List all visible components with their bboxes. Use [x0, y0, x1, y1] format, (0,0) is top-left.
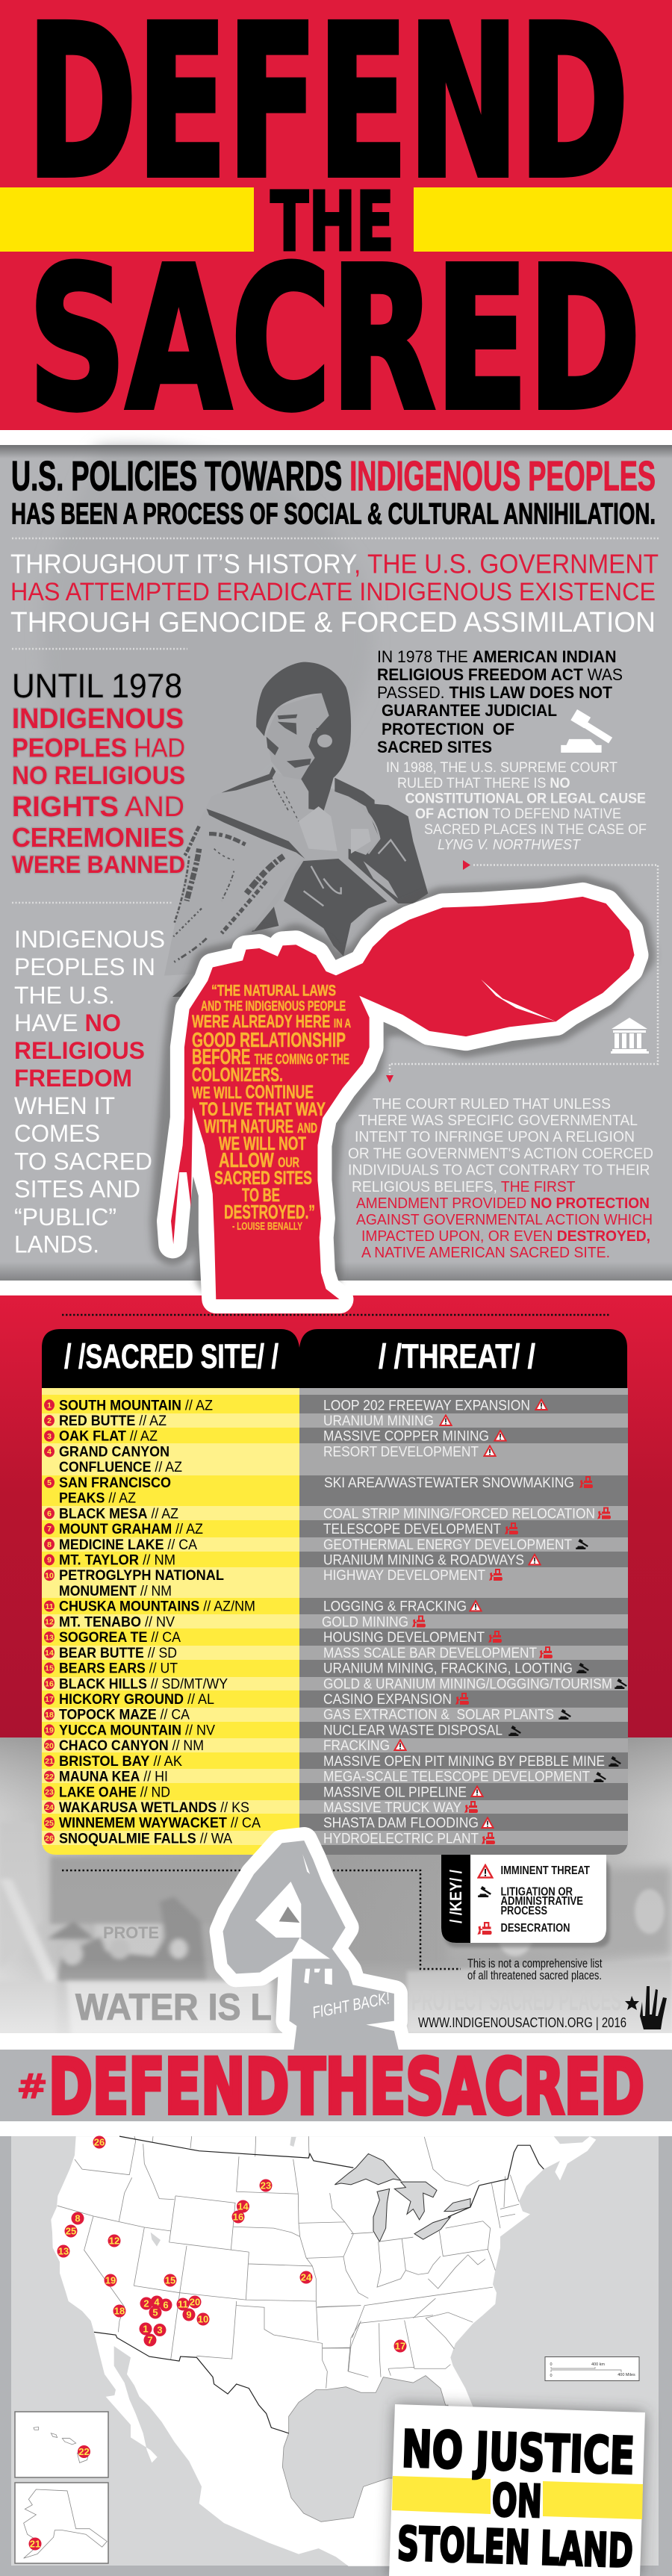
table: sacred sites and threats	[42, 1329, 628, 1855]
row 23 Lake Oahe: 23	[45, 1788, 54, 1796]
statement: history of eradication: THROUGH GENOCIDE & FORCED ASSIMILATION	[10, 607, 656, 638]
row 26 Snoqualmie Falls: HYDROELECTRIC PLANT	[323, 1831, 479, 1847]
row 19 Yucca Mountain: YUCCA MOUNTAIN // NV	[59, 1722, 215, 1738]
quote by Louise Benally: TO BE	[242, 1185, 280, 1206]
icon: gavel	[561, 709, 612, 753]
row 12 Mt. Tenabo: MT. TENABO // NV	[59, 1614, 175, 1630]
row 10 Petroglyph National Monument: 10	[45, 1571, 54, 1580]
excavator body	[223, 1841, 399, 2061]
text block: no religious freedom: PEOPLES IN	[14, 953, 155, 980]
header banner background	[0, 0, 672, 430]
text block: 1988 Supreme Court: SACRED PLACES IN THE CASE OF	[424, 822, 647, 838]
key label: imminent threat: IMMINENT THREAT	[500, 1864, 590, 1877]
text block: court ruling: RELIGIOUS BELIEFS, THE FIRST	[352, 1179, 575, 1195]
key icon: imminent threat	[479, 1865, 492, 1878]
portrait of Indigenous woman	[164, 662, 428, 997]
inset map: Hawaii	[15, 2412, 108, 2477]
key label: desecration: DESECRATION	[500, 1922, 570, 1935]
row 16 Black Hills	[44, 1676, 627, 1692]
map scale: 400 km	[591, 2362, 605, 2367]
row 25 Winnemem Wayacket: 25	[45, 1819, 54, 1828]
text block: court ruling: THERE WAS SPECIFIC GOVERNMENTAL	[358, 1113, 638, 1129]
text block: no religious freedom: WHEN IT	[14, 1092, 115, 1119]
text block: court ruling: IMPACTED UPON, OR EVEN DESTROYED,	[361, 1228, 650, 1245]
site markers: 5	[152, 2307, 158, 2318]
row 6 Black Mesa: BLACK MESA // AZ	[59, 1505, 178, 1522]
quote by Louise Benally: BEFORE THE COMING OF THE	[192, 1045, 349, 1069]
site markers: 6	[163, 2300, 169, 2310]
row 14 Bear Butte: BEAR BUTTE // SD	[59, 1645, 177, 1661]
site markers: 1	[143, 2324, 149, 2334]
row 23 Lake Oahe: LAKE OAHE // ND	[59, 1784, 170, 1800]
site markers: 16	[233, 2212, 243, 2222]
row 4 Grand Canyon Confluence: RESORT DEVELOPMENT	[323, 1444, 479, 1460]
row 19 Yucca Mountain: NUCLEAR WASTE DISPOSAL	[323, 1722, 503, 1738]
fist and feather fill	[171, 897, 635, 1299]
row 25 Winnemem Wayacket	[44, 1815, 494, 1832]
map scale	[545, 2356, 639, 2380]
row 16 Black Hills: 16	[45, 1680, 54, 1689]
quote by Louise Benally: SACRED SITES	[214, 1168, 312, 1189]
text block: court ruling: A NATIVE AMERICAN SACRED SITE.	[361, 1245, 610, 1261]
statement: history of eradication: HAS ATTEMPTED ERADICATE INDIGENOUS EXISTENCE	[10, 578, 656, 606]
row 14 Bear Butte: MASS SCALE BAR DEVELOPMENT	[323, 1645, 537, 1661]
row 17 Hickory Ground: CASINO EXPANSION	[323, 1691, 452, 1708]
site markers: 20	[190, 2297, 200, 2307]
text block: court ruling: AMENDMENT PROVIDED NO PROTECTION	[356, 1195, 650, 1212]
row 17 Hickory Ground	[44, 1691, 469, 1708]
illustration: excavator	[223, 1841, 399, 2061]
inset map: Alaska	[15, 2483, 108, 2563]
quote by Louise Benally: WE WILL CONTINUE	[192, 1082, 314, 1103]
quote by Louise Benally: GOOD RELATIONSHIP	[192, 1028, 346, 1051]
state lines west	[57, 2136, 373, 2389]
quote by Louise Benally: COLONIZERS.	[192, 1063, 283, 1086]
site markers: 11	[178, 2298, 188, 2310]
face	[267, 693, 330, 780]
row 8 Medicine Lake: GEOTHERMAL ENERGY DEVELOPMENT	[323, 1537, 572, 1553]
text block: until 1978: INDIGENOUS	[12, 703, 184, 735]
row 8 Medicine Lake	[44, 1537, 588, 1553]
sign text: protect: PROTE	[103, 1923, 159, 1942]
site markers: 23	[261, 2180, 271, 2191]
website credit: WWW.INDIGENOUSACTION.ORG | 2016	[418, 2015, 626, 2030]
white band above map	[0, 2121, 672, 2136]
dotted rule on red	[62, 1314, 611, 1316]
site markers: 10	[198, 2313, 208, 2325]
gulf of Mexico	[282, 2376, 448, 2521]
text block: court ruling: OR THE GOVERNMENT'S ACTION COERCED	[348, 1145, 653, 1162]
row 20 Chaco Canyon: 20	[45, 1741, 54, 1750]
text block: until 1978: RIGHTS AND	[12, 791, 184, 823]
text block: 1988 Supreme Court: RULED THAT THERE IS NO	[397, 776, 570, 791]
site markers: 4	[154, 2297, 160, 2307]
row 13 Sogorea Te: SOGOREA TE // CA	[59, 1629, 181, 1646]
row 18 Topock Maze: GAS EXTRACTION & SOLAR PLANTS	[323, 1707, 554, 1723]
text block: 1988 Supreme Court: CONSTITUTIONAL OR LEGAL CAUSE	[405, 791, 646, 807]
quote by Louise Benally: DESTROYED.”	[224, 1201, 315, 1223]
row 6 Black Mesa: 6	[47, 1510, 52, 1519]
text block: until 1978: WERE BANNED	[12, 851, 185, 878]
row 7 Mount Graham: 7	[47, 1525, 52, 1534]
row 15 Bears Ears	[44, 1661, 589, 1677]
arrow: dotted connector to court ruling	[386, 860, 658, 1083]
row 22 Mauna Kea: MAUNA KEA // HI	[59, 1769, 168, 1785]
row 15 Bears Ears: URANIUM MINING, FRACKING, LOOTING	[323, 1661, 573, 1677]
text block: no religious freedom: RELIGIOUS	[14, 1037, 145, 1064]
row 7 Mount Graham	[44, 1521, 518, 1537]
site markers: 24	[301, 2271, 312, 2283]
row 23 Lake Oahe: MASSIVE OIL PIPELINE	[323, 1784, 467, 1800]
quote by Louise Benally: WE WILL NOT	[219, 1133, 306, 1154]
text block: American Indian Religious Freedom Act: PASSED. THIS LAW DOES NOT	[377, 683, 613, 702]
text block: no religious freedom: “PUBLIC”	[14, 1204, 116, 1231]
row 26 Snoqualmie Falls	[44, 1831, 495, 1847]
row 5 San Francisco Peaks: PEAKS // AZ	[59, 1490, 136, 1507]
site markers: 2	[143, 2298, 149, 2309]
row 24 Wakarusa Wetlands: MASSIVE TRUCK WAY	[323, 1799, 461, 1816]
map scale: 0	[550, 2374, 553, 2378]
text block: American Indian Religious Freedom Act: SACRED SITES	[377, 738, 492, 756]
site markers: 3	[157, 2324, 163, 2336]
international border east	[448, 2145, 544, 2217]
quote by Louise Benally: “THE NATURAL LAWS	[211, 983, 336, 1000]
site markers: 9	[186, 2309, 192, 2321]
sign text	[396, 2420, 635, 2576]
title word: THE: THE	[270, 174, 394, 270]
row 25 Winnemem Wayacket: WINNEMEM WAYWACKET // CA	[59, 1815, 261, 1832]
key legend	[441, 1855, 610, 1947]
fist shadow	[171, 897, 635, 1275]
text block: until 1978: PEOPLES HAD	[12, 734, 185, 763]
key icon: litigation	[478, 1886, 491, 1897]
text block: until 1978: UNTIL 1978	[12, 667, 182, 705]
row 17 Hickory Ground: HICKORY GROUND // AL	[59, 1691, 214, 1708]
table row bands	[42, 1388, 628, 1855]
text block: American Indian Religious Freedom Act: GUARANTEE JUDICIAL	[382, 701, 557, 720]
row 13 Sogorea Te: HOUSING DEVELOPMENT	[323, 1629, 485, 1646]
row 24 Wakarusa Wetlands: 24	[45, 1803, 54, 1812]
text block: no religious freedom: LANDS.	[14, 1231, 99, 1257]
white divider band	[0, 430, 672, 445]
row 26 Snoqualmie Falls: 26	[45, 1835, 54, 1844]
site markers: 15	[165, 2274, 175, 2286]
yellow bar right	[414, 187, 672, 252]
row 10 Petroglyph National Monument: HIGHWAY DEVELOPMENT	[323, 1567, 485, 1584]
table header	[42, 1329, 627, 1388]
protest sign: no justice on stolen land	[389, 2404, 645, 2576]
row 1 South Mountain: SOUTH MOUNTAIN // AZ	[59, 1397, 213, 1413]
row 11 Chuska Mountains: LOGGING & FRACKING	[323, 1599, 467, 1615]
text block: no religious freedom: SITES AND	[14, 1176, 140, 1203]
statement: history of eradication: THROUGHOUT IT’S HISTORY, THE U.S. GOVERNMENT	[10, 548, 659, 579]
text block: no religious freedom: FREEDOM	[14, 1065, 132, 1092]
text block: court ruling: INDIVIDUALS TO ACT CONTRARY TO THEIR	[348, 1163, 650, 1179]
site markers: 19	[105, 2274, 116, 2286]
row 21 Bristol Bay: MASSIVE OPEN PIT MINING BY PEBBLE MINE	[323, 1753, 605, 1770]
row 8 Medicine Lake: MEDICINE LAKE // CA	[59, 1537, 197, 1553]
sign text: ON	[491, 2474, 543, 2528]
quote by Louise Benally: WERE ALREADY HERE IN A	[192, 1012, 351, 1032]
row 2 Red Butte	[44, 1413, 452, 1429]
row 26 Snoqualmie Falls: SNOQUALMIE FALLS // WA	[59, 1831, 232, 1847]
row 8 Medicine Lake: 8	[47, 1540, 52, 1549]
row 15 Bears Ears: BEARS EARS // UT	[59, 1661, 178, 1677]
site markers: 26	[94, 2137, 105, 2147]
row 21 Bristol Bay	[44, 1753, 621, 1770]
short dotted rule	[12, 648, 187, 650]
text block: no religious freedom: THE U.S.	[14, 982, 115, 1009]
text block: court ruling	[348, 1096, 653, 1261]
text block: until 1978	[12, 667, 185, 878]
disclaimer note: This is not a comprehensive list	[467, 1956, 603, 1970]
site markers: 22	[78, 2446, 90, 2457]
key label: litigation	[500, 1886, 583, 1917]
row 22 Mauna Kea	[44, 1769, 606, 1785]
site markers: 8	[75, 2213, 81, 2224]
row 5 San Francisco Peaks: 5	[47, 1478, 52, 1487]
site markers: 14	[237, 2201, 249, 2212]
banner text: water is life: WATER IS L	[75, 1986, 272, 2028]
row 15 Bears Ears: 15	[45, 1664, 54, 1673]
quote by Louise Benally: - LOUISE BENALLY	[232, 1221, 302, 1233]
row 11 Chuska Mountains: CHUSKA MOUNTAINS // AZ/NM	[59, 1599, 255, 1615]
key label: litigation: LITIGATION OR	[500, 1886, 573, 1899]
row 14 Bear Butte: 14	[45, 1649, 54, 1658]
row 9 Mt. Taylor: MT. TAYLOR // NM	[59, 1552, 175, 1568]
row 20 Chaco Canyon: CHACO CANYON // NM	[59, 1737, 204, 1754]
yellow bar left	[0, 187, 254, 252]
row 14 Bear Butte	[44, 1645, 553, 1661]
row 1 South Mountain: 1	[47, 1401, 52, 1410]
row 12 Mt. Tenabo: 12	[45, 1618, 54, 1627]
text block: no religious freedom	[14, 926, 165, 1257]
text block: court ruling: THE COURT RULED THAT UNLESS	[373, 1096, 611, 1113]
state lines east	[317, 2137, 519, 2377]
row 2 Red Butte: RED BUTTE // AZ	[59, 1413, 167, 1429]
statement: history of eradication	[10, 548, 659, 638]
row 2 Red Butte: 2	[47, 1416, 52, 1425]
row 4 Grand Canyon Confluence: 4	[47, 1448, 52, 1457]
row 5 San Francisco Peaks: SAN FRANCISCO	[59, 1475, 171, 1491]
key icon: desecration	[477, 1922, 492, 1935]
map landmass west	[51, 2136, 596, 2566]
white band above threats section	[0, 1281, 672, 1295]
text block: American Indian Religious Freedom Act: IN 1978 THE AMERICAN INDIAN	[377, 647, 617, 666]
text block: no religious freedom: TO SACRED	[14, 1148, 152, 1175]
row 3 Oak Flat: OAK FLAT // AZ	[59, 1428, 158, 1445]
row 16 Black Hills: BLACK HILLS // SD/MT/WY	[59, 1676, 228, 1692]
panel: protest photo background	[0, 1737, 672, 2036]
title: DEFEND THE SACRED	[0, 0, 672, 453]
key label: litigation: PROCESS	[500, 1905, 547, 1917]
text block: no religious freedom: HAVE NO	[14, 1009, 121, 1036]
fist outline	[171, 897, 635, 1299]
row 3 Oak Flat: 3	[47, 1432, 52, 1441]
dotted connector to disclaimer	[62, 1870, 461, 1969]
quote by Louise Benally	[192, 983, 351, 1233]
site markers	[28, 2135, 406, 2551]
shawl body	[164, 771, 428, 976]
text block: American Indian Religious Freedom Act: RELIGIOUS FREEDOM ACT WAS	[377, 665, 623, 684]
map scale: 0	[550, 2362, 553, 2367]
row 10 Petroglyph National Monument: PETROGLYPH NATIONAL	[59, 1567, 224, 1584]
hashtag heading: #	[16, 2067, 48, 2106]
text block: until 1978: NO RELIGIOUS	[12, 762, 185, 790]
disclaimer note	[467, 1956, 603, 1982]
text block: 1988 Supreme Court: OF ACTION TO DEFEND NATIVE	[415, 806, 621, 822]
quote by Louise Benally: AND THE INDIGENOUS PEOPLE	[201, 998, 346, 1014]
row 3 Oak Flat	[44, 1428, 506, 1445]
text block: no religious freedom: INDIGENOUS	[14, 926, 165, 953]
shawl mottling	[172, 777, 299, 962]
site markers: 7	[147, 2334, 153, 2346]
panel: threats section background	[0, 1295, 672, 1737]
row 19 Yucca Mountain	[44, 1722, 521, 1738]
row 25 Winnemem Wayacket: SHASTA DAM FLOODING	[323, 1815, 479, 1832]
text block: court ruling: AGAINST GOVERNMENTAL ACTION WHICH	[356, 1212, 653, 1228]
map scale: 400 Miles	[617, 2373, 635, 2377]
illustration: raised fist holding feather	[171, 897, 635, 1299]
row 6 Black Mesa	[44, 1505, 611, 1522]
row 13 Sogorea Te: 13	[45, 1633, 54, 1642]
row 18 Topock Maze: TOPOCK MAZE // CA	[59, 1707, 190, 1723]
text block: until 1978: CEREMONIES	[12, 822, 184, 853]
row 3 Oak Flat: MASSIVE COPPER MINING	[323, 1428, 489, 1445]
site markers: 18	[114, 2306, 125, 2316]
row 23 Lake Oahe	[44, 1784, 483, 1800]
row 9 Mt. Taylor	[44, 1552, 541, 1568]
row 4 Grand Canyon Confluence	[44, 1444, 496, 1475]
quote by Louise Benally: ALLOW OUR	[219, 1148, 299, 1172]
row 22 Mauna Kea: MEGA-SCALE TELESCOPE DEVELOPMENT	[323, 1769, 590, 1785]
row 18 Topock Maze: 18	[45, 1711, 54, 1720]
row 1 South Mountain	[44, 1397, 547, 1413]
text block: 1988 Supreme Court	[386, 760, 647, 853]
row 10 Petroglyph National Monument	[44, 1567, 503, 1599]
row 13 Sogorea Te	[44, 1629, 502, 1646]
white band above hashtag	[0, 2033, 672, 2050]
row 12 Mt. Tenabo: GOLD MINING	[322, 1614, 408, 1630]
row 9 Mt. Taylor: 9	[47, 1556, 52, 1565]
key title: / /KEY/ /	[447, 1870, 465, 1923]
row 20 Chaco Canyon	[44, 1737, 406, 1754]
row 7 Mount Graham: TELESCOPE DEVELOPMENT	[323, 1521, 501, 1537]
icon: courthouse	[611, 1018, 649, 1054]
site markers: 21	[30, 2539, 40, 2549]
dotted rule under heading	[12, 538, 659, 539]
row 7 Mount Graham: MOUNT GRAHAM // AZ	[59, 1521, 203, 1537]
row 24 Wakarusa Wetlands	[44, 1799, 478, 1816]
site markers: 17	[395, 2340, 405, 2352]
row 11 Chuska Mountains	[44, 1599, 482, 1615]
international border west	[94, 2136, 353, 2433]
text block: no religious freedom: COMES	[14, 1120, 100, 1147]
map east details	[317, 2137, 544, 2377]
row 5 San Francisco Peaks: SKI AREA/WASTEWATER SNOWMAKING	[324, 1475, 574, 1491]
short dotted rule 2	[12, 902, 173, 903]
row 24 Wakarusa Wetlands: WAKARUSA WETLANDS // KS	[59, 1799, 249, 1816]
panel: hashtag strip	[0, 2050, 672, 2121]
panel: map of sacred sites	[0, 2135, 672, 2576]
row 21 Bristol Bay: BRISTOL BAY // AK	[59, 1753, 182, 1770]
row 4 Grand Canyon Confluence: CONFLUENCE // AZ	[59, 1459, 182, 1475]
panel: US policy history background	[0, 445, 672, 1281]
row 19 Yucca Mountain: 19	[45, 1726, 54, 1735]
disclaimer note: of all threatened sacred places.	[467, 1968, 602, 1982]
row 21 Bristol Bay: 21	[45, 1757, 54, 1766]
text block: 1988 Supreme Court: IN 1988, THE U.S. SUPREME COURT	[386, 760, 617, 776]
row 10 Petroglyph National Monument: MONUMENT // NM	[59, 1583, 172, 1599]
great lakes	[335, 2153, 470, 2241]
row 18 Topock Maze	[44, 1707, 571, 1723]
table header: / /THREAT/ /	[379, 1337, 535, 1375]
quote by Louise Benally: TO LIVE THAT WAY	[199, 1099, 326, 1120]
label: fight back: FIGHT BACK!	[311, 1988, 391, 2022]
row 20 Chaco Canyon: FRACKING	[323, 1737, 390, 1754]
quote by Louise Benally: WITH NATURE AND	[204, 1116, 317, 1137]
site markers: 12	[109, 2236, 119, 2246]
site markers: 13	[58, 2246, 69, 2256]
site markers: 25	[66, 2225, 76, 2237]
row 6 Black Mesa: COAL STRIP MINING/FORCED RELOCATION	[323, 1505, 595, 1522]
text block: American Indian Religious Freedom Act: PROTECTION OF	[382, 720, 514, 738]
row 17 Hickory Ground: 17	[45, 1695, 54, 1704]
table header: / /SACRED SITE/ /	[64, 1337, 279, 1375]
icon: hand print and star	[625, 1986, 667, 2029]
row 22 Mauna Kea: 22	[45, 1773, 54, 1782]
row 1 South Mountain: LOOP 202 FREEWAY EXPANSION	[323, 1397, 530, 1413]
row 12 Mt. Tenabo	[44, 1614, 426, 1630]
row 9 Mt. Taylor: URANIUM MINING & ROADWAYS	[323, 1552, 524, 1568]
heading: US policies	[11, 452, 656, 530]
row 5 San Francisco Peaks	[44, 1475, 593, 1507]
text block: court ruling: INTENT TO INFRINGE UPON A RELIGION	[355, 1129, 635, 1145]
row 16 Black Hills: GOLD & URANIUM MINING/LOGGING/TOURISM	[323, 1676, 612, 1692]
row 4 Grand Canyon Confluence: GRAND CANYON	[59, 1444, 169, 1460]
sign yellow bars	[392, 2476, 643, 2519]
text block: American Indian Religious Freedom Act	[377, 647, 623, 756]
key label: litigation: ADMINISTRATIVE	[500, 1895, 583, 1908]
text block: 1988 Supreme Court: LYNG V. NORTHWEST	[438, 838, 581, 853]
row 2 Red Butte: URANIUM MINING	[323, 1413, 434, 1429]
row 11 Chuska Mountains: 11	[45, 1602, 54, 1611]
